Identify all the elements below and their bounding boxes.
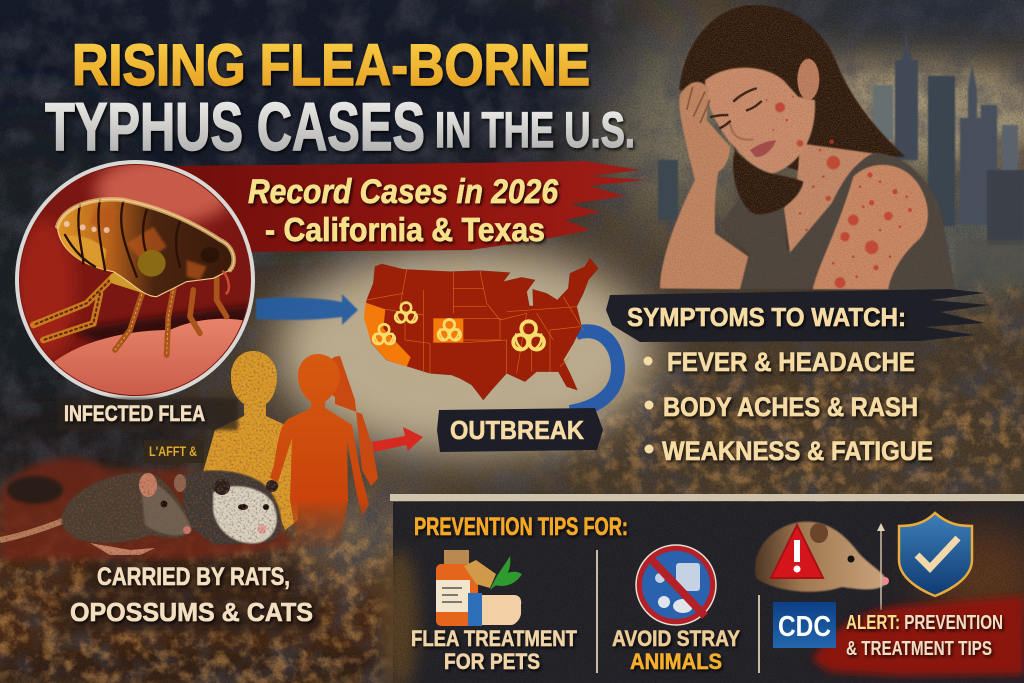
prevention panel	[382, 494, 1024, 683]
rock shadow	[7, 476, 63, 504]
carried by line 1: CARRIED BY RATS,	[97, 563, 290, 591]
banner text line 1: Record Cases in 2026	[248, 173, 559, 211]
CDC badge	[773, 602, 836, 648]
flea mouthparts	[223, 272, 229, 293]
raised hand and arm	[660, 82, 748, 289]
carried by line 2: OPOSSUMS & CATS	[70, 597, 313, 627]
fingertip	[54, 318, 243, 395]
rash spots	[766, 96, 912, 288]
carried by label	[60, 560, 322, 632]
icon: rodent with warning	[755, 522, 889, 592]
flea magnified circle	[15, 155, 253, 400]
Colorado	[433, 318, 463, 343]
nose shadow	[730, 123, 753, 140]
icon: shield check	[899, 513, 972, 596]
flea treatment text: FLEA TREATMENT	[411, 626, 577, 651]
red arrow to outbreak	[372, 427, 423, 452]
opossum	[183, 470, 281, 545]
flea eye	[201, 247, 219, 263]
infected flea label	[58, 398, 238, 430]
banner text line 2: - California & Texas	[265, 211, 545, 248]
biohazard markers	[373, 302, 544, 350]
avoid stray text: ANIMALS	[630, 649, 722, 674]
opossum eyes	[238, 504, 248, 510]
opossum ears	[214, 479, 230, 495]
small label text: L'AFFT &	[149, 443, 197, 459]
flea hairs	[57, 199, 234, 270]
rat ears	[139, 473, 157, 497]
ear	[797, 59, 819, 100]
title	[45, 33, 635, 165]
rat paw	[90, 543, 155, 555]
dividers	[596, 550, 598, 673]
warning triangle	[771, 525, 823, 578]
curved blue arrow	[570, 331, 618, 412]
state borders	[367, 269, 583, 373]
panel background	[393, 502, 1024, 683]
curly hair lobe	[733, 150, 803, 214]
flea abdomen bands	[65, 200, 180, 277]
symptoms banner	[606, 289, 990, 342]
garbled small label	[144, 440, 204, 463]
title line 2 end: IN THE U.S.	[435, 102, 635, 158]
rat eye	[160, 500, 168, 508]
avoid stray text: AVOID STRAY	[612, 626, 740, 651]
prevention heading: PREVENTION TIPS FOR:	[414, 513, 628, 541]
yellow person	[203, 351, 298, 530]
hair	[679, 5, 905, 173]
CDC text: CDC	[778, 611, 831, 643]
rat nose	[183, 526, 191, 534]
flea thorax highlight	[138, 250, 166, 277]
avoid stray text	[612, 626, 740, 674]
symptoms panel	[606, 289, 990, 466]
title line 2: TYPHUS CASES	[45, 89, 425, 165]
shadow below flea	[70, 305, 250, 345]
panel top rule	[390, 494, 1024, 501]
silhouettes of people	[203, 351, 378, 548]
fingers	[687, 87, 710, 123]
outbreak text: OUTBREAK	[450, 415, 584, 445]
flea abdomen highlights	[64, 221, 110, 233]
flea treatment text	[411, 626, 577, 674]
California	[364, 303, 411, 367]
city skyline	[658, 30, 1024, 285]
front person	[270, 354, 369, 548]
thin up arrow	[877, 523, 885, 610]
red alert brush	[812, 596, 1024, 676]
red banner	[165, 161, 645, 252]
map land	[365, 258, 598, 400]
rash arm	[813, 165, 928, 289]
chest	[784, 143, 873, 253]
opossum nose	[258, 524, 266, 534]
icon: no stray animals	[636, 545, 716, 625]
title line 1: RISING FLEA-BORNE	[72, 33, 590, 98]
outbreak label	[437, 408, 603, 452]
flea body	[57, 199, 234, 297]
alert text	[846, 612, 1003, 660]
woman with rash	[660, 5, 955, 289]
flea legs	[33, 199, 234, 355]
bullet fever: FEVER & HEADACHE	[667, 347, 915, 377]
background skin	[95, 155, 235, 225]
back person	[325, 356, 378, 486]
rat tail	[0, 520, 65, 540]
infected flea text: INFECTED FLEA	[64, 401, 205, 426]
symptoms heading: SYMPTOMS TO WATCH:	[627, 302, 906, 332]
arrow: flea to map	[256, 294, 358, 325]
bullet aches: BODY ACHES & RASH	[663, 392, 918, 422]
face	[705, 67, 815, 173]
flea treatment text: FOR PETS	[444, 649, 540, 674]
rat	[0, 473, 192, 555]
shirt	[722, 153, 955, 289]
eyes and brows	[710, 88, 762, 128]
lips	[750, 141, 776, 157]
center parchment	[275, 245, 655, 455]
ground strip	[0, 458, 300, 560]
bullet weakness: WEAKNESS & FATIGUE	[662, 436, 933, 466]
US outbreak map	[364, 258, 598, 400]
flea amber plates	[62, 235, 107, 270]
icon: flea treatment	[436, 550, 522, 626]
